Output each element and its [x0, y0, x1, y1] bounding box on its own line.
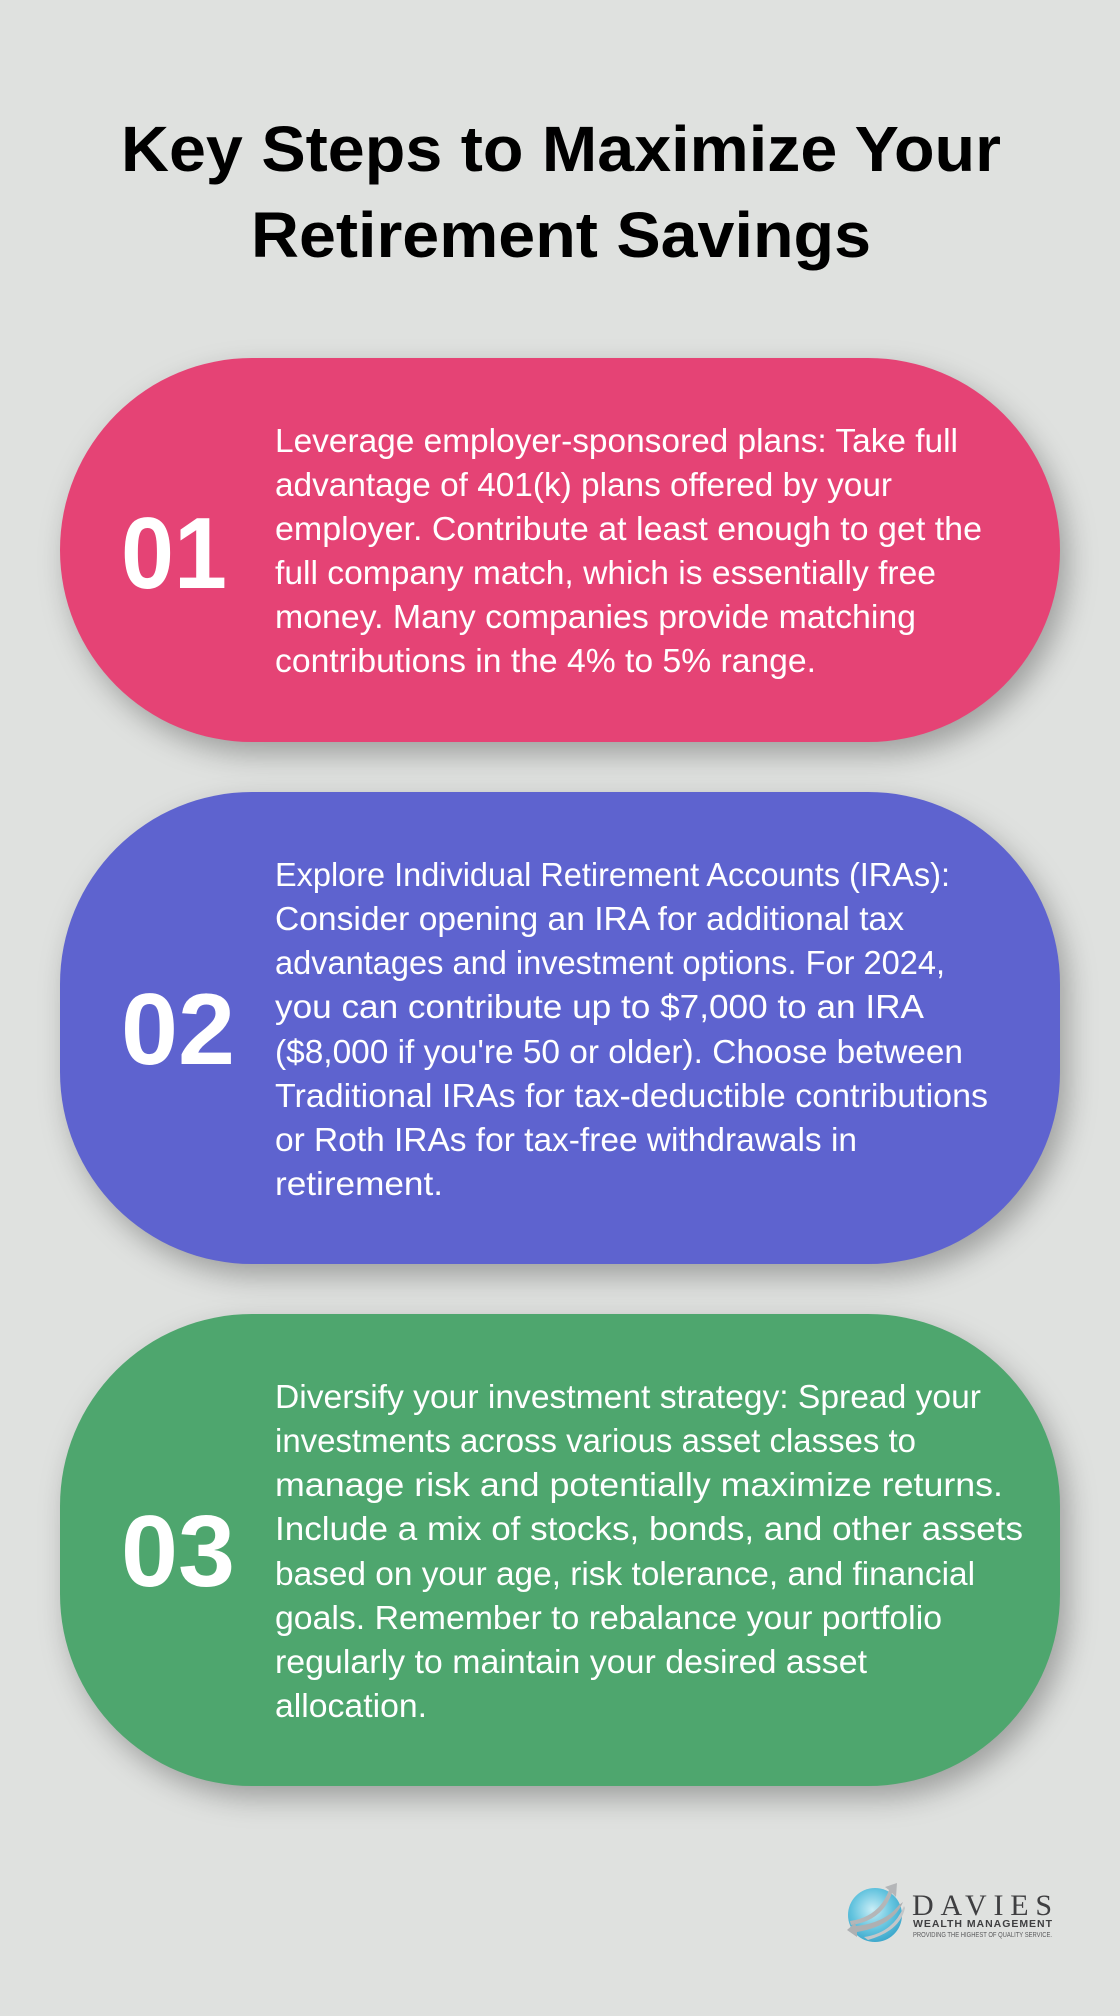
step 02 text: or Roth IRAs for tax-free withdrawals in — [275, 1121, 857, 1158]
wordmark DAVIES: DAVIES — [912, 1889, 1052, 1922]
card background blue — [60, 792, 1060, 1264]
step 03 text — [275, 1378, 1023, 1724]
tagline: PROVIDING THE HIGHEST OF QUALITY SERVICE. — [913, 1932, 1052, 1939]
step 03 text: allocation. — [275, 1687, 427, 1724]
step 01 text: contributions in the 4% to 5% range. — [275, 642, 816, 679]
step 03 text: goals. Remember to rebalance your portfolio — [275, 1599, 942, 1636]
panel: step 03 diversify — [60, 1314, 1060, 1786]
step 02 text: ($8,000 if you're 50 or older). Choose between — [275, 1033, 963, 1070]
step 02 text: advantages and investment options. For 2024, — [275, 944, 945, 981]
card background pink — [60, 358, 1060, 742]
step 02 text — [275, 856, 988, 1202]
step 02 text: Consider opening an IRA for additional tax — [275, 900, 905, 937]
step 02 text: you can contribute up to $7,000 to an IRA — [275, 988, 924, 1025]
step 03 text: Include a mix of stocks, bonds, and other assets — [275, 1510, 1023, 1547]
step 02 text: Traditional IRAs for tax-deductible contributions — [275, 1077, 988, 1114]
card background green — [60, 1314, 1060, 1786]
step number 01: 01 — [121, 498, 227, 610]
step 01 text: money. Many companies provide matching — [275, 598, 916, 635]
step number 03: 03 — [121, 1496, 235, 1608]
icon: globe with arrows — [847, 1883, 905, 1942]
step 03 text: Diversify your investment strategy: Spread your — [275, 1378, 981, 1415]
step 03 text: regularly to maintain your desired asset — [275, 1643, 867, 1680]
step 01 text: employer. Contribute at least enough to get the — [275, 510, 982, 547]
step 03 text: investments across various asset classes to — [275, 1422, 916, 1459]
step 03 text: based on your age, risk tolerance, and financial — [275, 1555, 975, 1592]
title: Retirement Savings — [251, 199, 871, 271]
title — [121, 113, 1001, 271]
step 01 text: Leverage employer-sponsored plans: Take full — [275, 422, 958, 459]
step 01 text: full company match, which is essentially free — [275, 554, 936, 591]
title: Key Steps to Maximize Your — [121, 113, 1001, 185]
step 01 text: advantage of 401(k) plans offered by your — [275, 466, 892, 503]
step 03 text: manage risk and potentially maximize returns. — [275, 1466, 1003, 1503]
panel: step 01 employer-sponsored plans — [60, 358, 1060, 742]
step number 02: 02 — [121, 974, 235, 1086]
wordmark WEALTH MANAGEMENT: WEALTH MANAGEMENT — [913, 1918, 1053, 1930]
logo: Davies Wealth Management — [847, 1883, 1053, 1942]
panel: step 02 IRAs — [60, 792, 1060, 1264]
step 01 text — [275, 422, 982, 679]
step 02 text: Explore Individual Retirement Accounts (IRAs): — [275, 856, 950, 893]
step 02 text: retirement. — [275, 1165, 443, 1202]
